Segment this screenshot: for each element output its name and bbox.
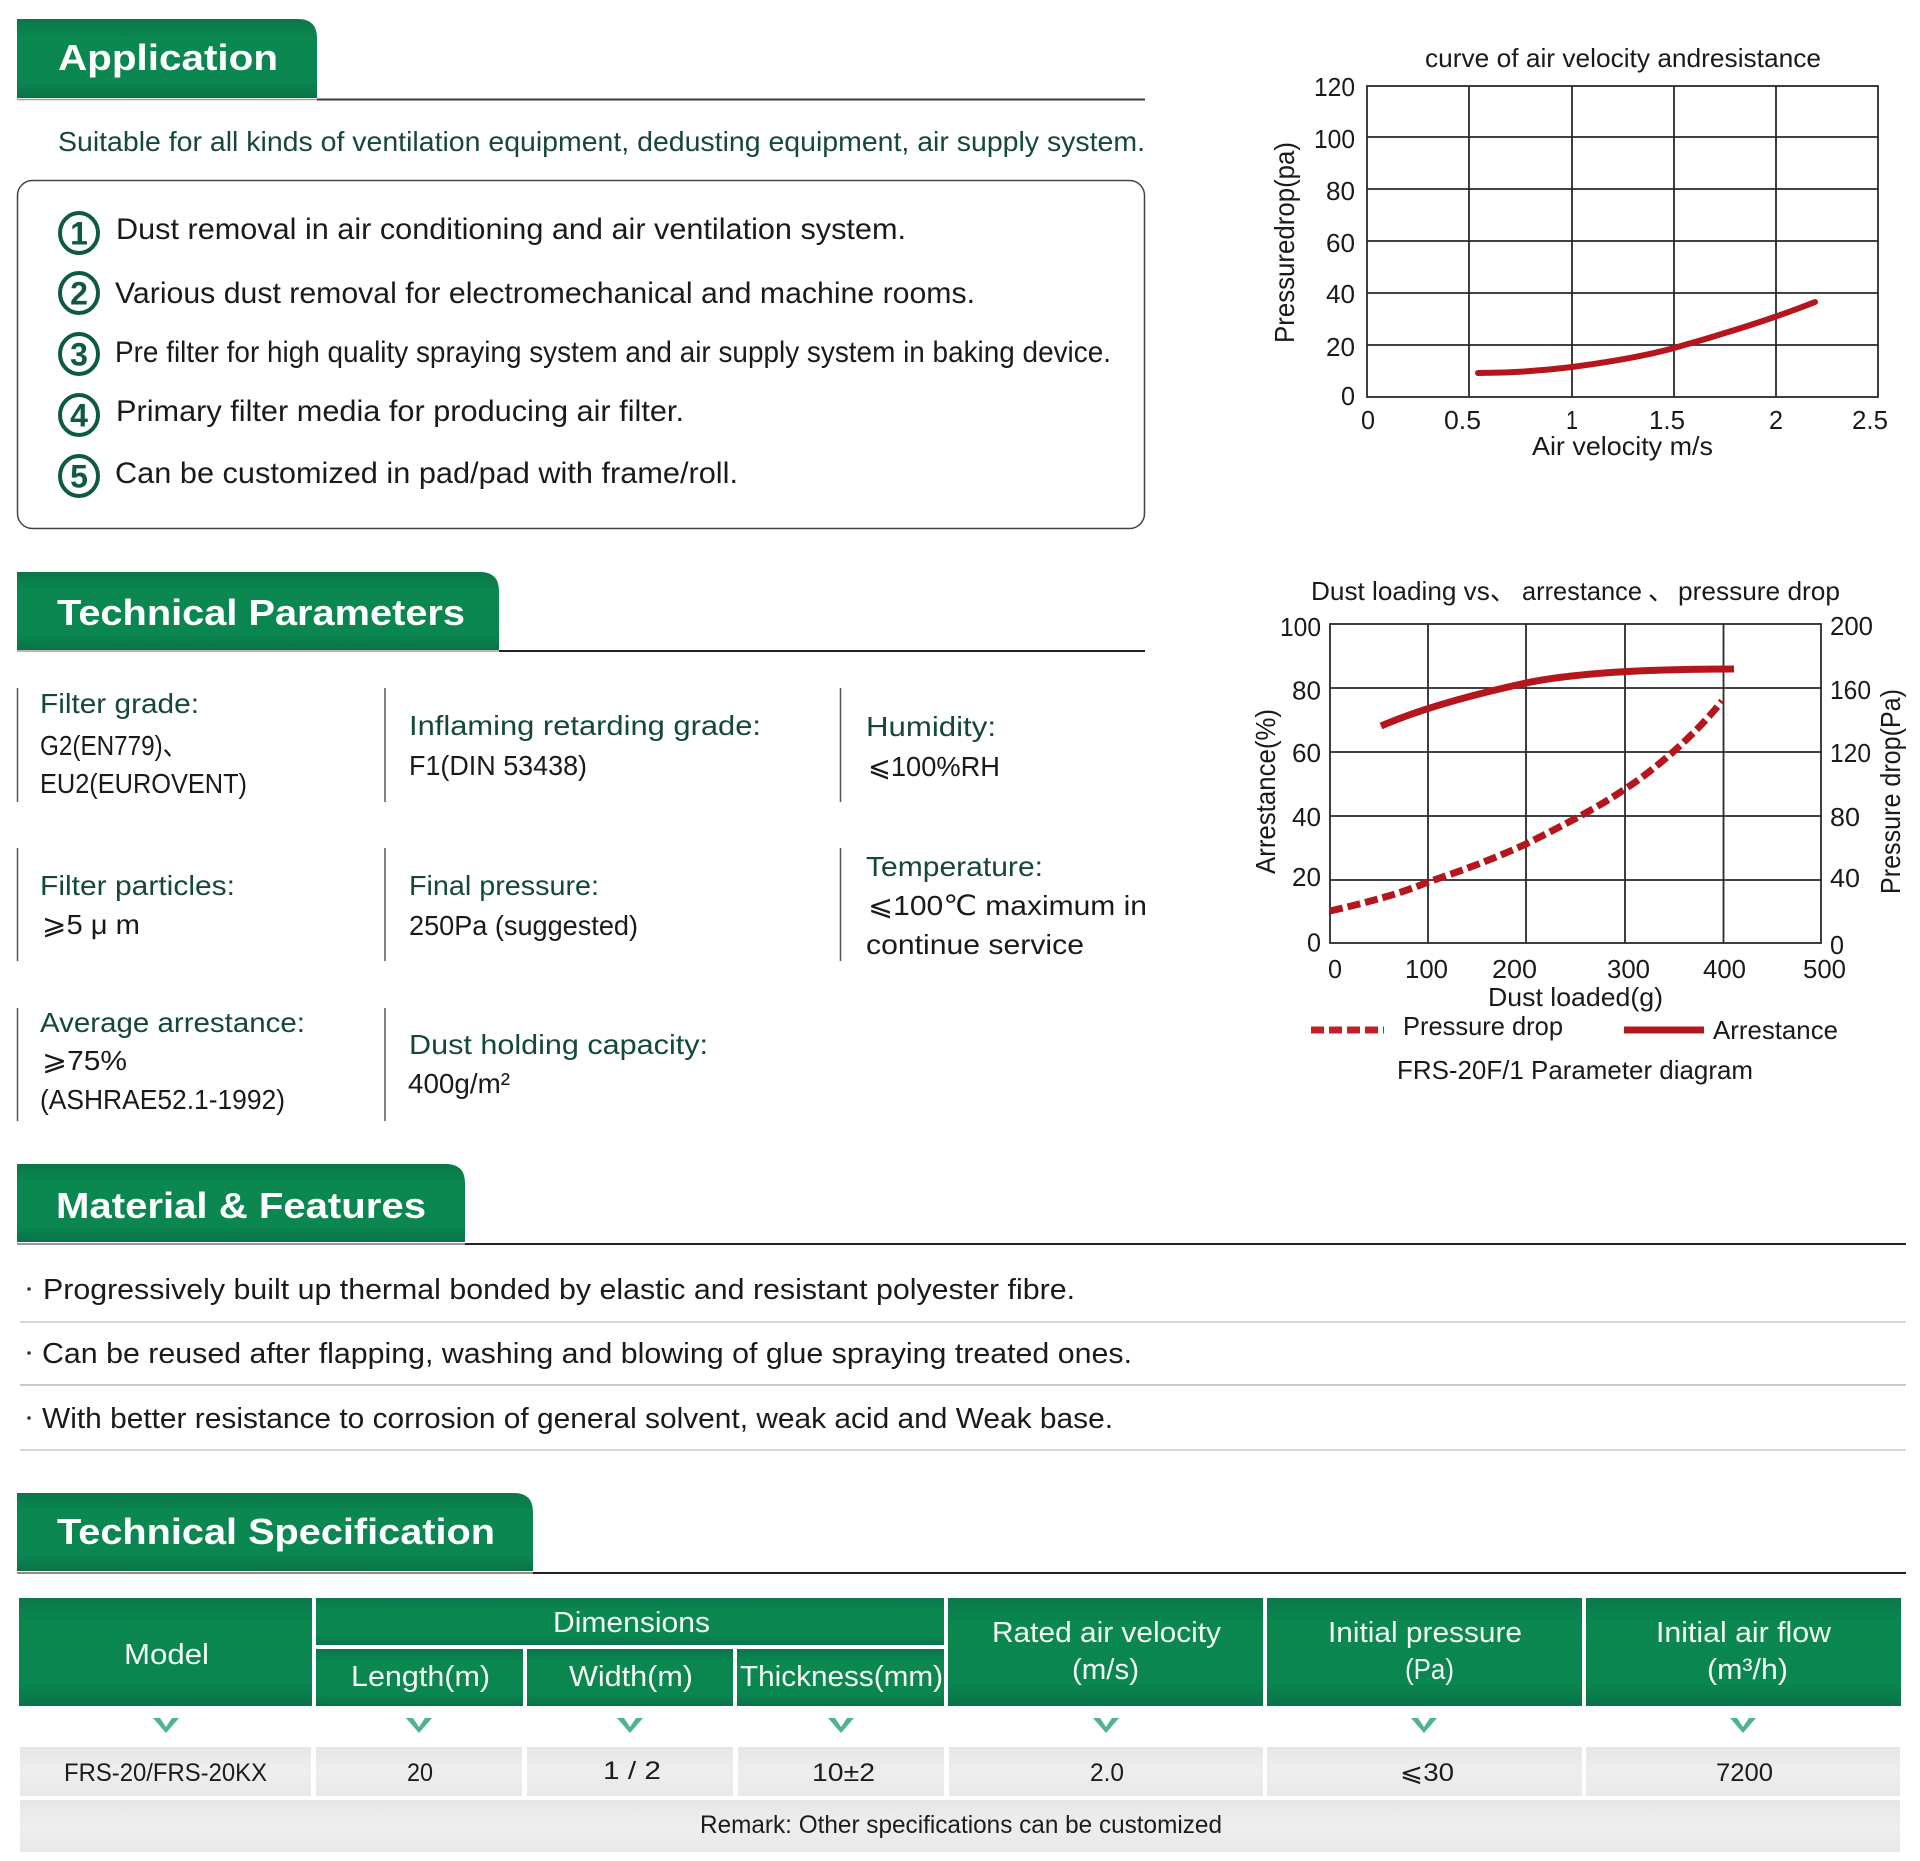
curve: arrestance [1381, 669, 1734, 726]
right axis ticks [1830, 611, 1873, 960]
x axis label: Air velocity m/s [1532, 431, 1713, 461]
parameter: average arrestance [40, 1007, 305, 1115]
chart: air velocity and resistance [1269, 43, 1888, 461]
legend: Pressure drop [1403, 1011, 1563, 1041]
table header: Length(m) [351, 1661, 490, 1693]
heading tab: Material & Features [17, 1164, 465, 1242]
x axis ticks: 0.5 [1444, 405, 1481, 435]
table data row: 7200 [1716, 1759, 1773, 1787]
y axis ticks: 0 [1341, 381, 1355, 411]
table remark row: Remark: Other specifications can be customized [700, 1811, 1222, 1839]
right axis ticks: 0 [1830, 930, 1844, 960]
chart title: 、 [1648, 576, 1674, 606]
chart title: curve of air velocity andresistance [1425, 43, 1821, 73]
parameter: humidity [866, 711, 1000, 782]
x axis ticks: 0 [1361, 405, 1375, 435]
parameter: dust holding capacity [408, 1029, 708, 1099]
list item 1: Dust removal in air conditioning and air ventilation system. [116, 213, 906, 246]
chart title: Dust loading vs、 [1311, 576, 1516, 606]
x axis ticks: 1 [1566, 405, 1578, 435]
parameter: temperature: ⩽100℃ maximum in [868, 890, 1147, 921]
list item 4: 4 [70, 398, 88, 434]
parameter: temperature [866, 851, 1147, 960]
diagram caption: FRS-20F/1 Parameter diagram [1397, 1055, 1753, 1085]
chart title [1311, 576, 1840, 606]
table data row [20, 1747, 1900, 1796]
x axis ticks: 2 [1769, 405, 1783, 435]
chart title: arrestance [1522, 576, 1642, 606]
parameter: filter particles: ⩾5 μ m [42, 909, 140, 940]
x axis ticks: 1.5 [1649, 405, 1685, 435]
panel: technical parameters [17, 572, 1147, 1121]
table header: (m/s) [1072, 1654, 1139, 1686]
table header: (m³/h) [1707, 1654, 1788, 1686]
x axis label: Dust loaded(g) [1488, 982, 1663, 1012]
left axis ticks: 20 [1292, 862, 1321, 892]
right axis ticks: 80 [1830, 802, 1860, 832]
x axis ticks: 0 [1328, 954, 1342, 984]
table header: Initial air flow [1656, 1617, 1832, 1649]
table header: Width(m) [569, 1661, 693, 1693]
parameter: final pressure [409, 870, 638, 941]
parameter: filter particles: Filter particles: [40, 870, 235, 901]
list item 1: 1 [70, 216, 88, 252]
y axis ticks: 20 [1326, 332, 1355, 362]
table header: Thickness(mm) [740, 1661, 943, 1693]
table data row: FRS-20/FRS-20KX [64, 1759, 267, 1787]
left axis ticks: 100 [1280, 612, 1321, 642]
icon: chevrons [153, 1718, 1756, 1733]
parameter: final pressure: Final pressure: [409, 870, 599, 901]
parameter: humidity: ⩽100%RH [868, 751, 1000, 782]
chart: dust loading vs arrestance and pressure drop [1250, 576, 1906, 1085]
box: application list [18, 180, 1144, 528]
chart title: pressure drop [1678, 576, 1840, 606]
parameter: average arrestance: Average arrestance: [40, 1007, 305, 1038]
parameter: filter particles [40, 870, 235, 940]
parameter: temperature: continue service [866, 929, 1084, 960]
legend: Arrestance [1713, 1015, 1838, 1045]
parameter: inflaming retarding grade [409, 710, 761, 781]
table data row: 1 / 2 [603, 1757, 661, 1785]
x axis ticks [1361, 405, 1888, 435]
y axis ticks: 40 [1326, 279, 1355, 309]
list item 2: 2 [70, 276, 88, 312]
heading tab: Technical Specification: Technical Specification [57, 1511, 495, 1552]
left axis ticks: 0 [1307, 928, 1321, 958]
left axis ticks: 60 [1292, 738, 1321, 768]
legend [1311, 1011, 1838, 1045]
x axis ticks: 200 [1492, 954, 1537, 984]
table header: Model [124, 1639, 209, 1671]
parameter: temperature: Temperature: [866, 851, 1043, 882]
x axis ticks: 2.5 [1852, 405, 1888, 435]
left axis ticks: 80 [1292, 676, 1321, 706]
table data row: ⩽30 [1400, 1759, 1454, 1787]
feature 3: With better resistance to corrosion of general solvent, weak acid and Weak base. [42, 1403, 1113, 1435]
table remark row [20, 1800, 1900, 1852]
heading tab: Application [17, 19, 317, 98]
parameter: inflaming retarding grade: Inflaming retarding grade: [409, 710, 761, 741]
left axis label: Arrestance(%) [1250, 709, 1281, 874]
y axis ticks: 80 [1326, 176, 1355, 206]
table header: Initial pressure [1328, 1617, 1522, 1649]
feature 2: Can be reused after flapping, washing and blowing of glue spraying treated ones. [42, 1338, 1132, 1370]
heading tab: Technical Parameters: Technical Parameters [57, 592, 465, 633]
y axis ticks: 100 [1314, 124, 1355, 154]
parameter: dust holding capacity: 400g/m² [408, 1068, 510, 1099]
parameter: filter grade [40, 688, 247, 799]
parameter: filter grade: G2(EN779)、 [40, 730, 187, 761]
text: application summary: Suitable for all kinds of ventilation equipment, dedusting equipment, air supply system. [58, 126, 1145, 157]
heading tab: Technical Parameters [17, 572, 499, 650]
parameter: filter grade: EU2(EUROVENT) [40, 768, 247, 799]
y axis ticks: 120 [1314, 72, 1355, 102]
list item 2: Various dust removal for electromechanical and machine rooms. [115, 277, 975, 310]
x axis ticks: 500 [1803, 954, 1846, 984]
list item 5: 5 [70, 458, 88, 494]
x axis ticks: 100 [1405, 954, 1448, 984]
y axis ticks [1314, 72, 1355, 411]
x axis ticks: 400 [1703, 954, 1746, 984]
parameter: filter grade: Filter grade: [40, 688, 199, 719]
curve [1478, 302, 1815, 373]
table data row: 2.0 [1090, 1759, 1124, 1787]
parameter: final pressure: 250Pa (suggested) [409, 910, 638, 941]
heading tab: Material & Features: Material & Features [56, 1185, 426, 1226]
parameter: average arrestance: ⩾75% [42, 1045, 127, 1076]
parameter: dust holding capacity: Dust holding capacity: [409, 1029, 708, 1060]
list item 5: Can be customized in pad/pad with frame/roll. [115, 457, 738, 490]
right axis ticks: 120 [1830, 738, 1871, 768]
panel: application [17, 19, 1145, 528]
panel: material and features [17, 1164, 1906, 1450]
table header [19, 1598, 1901, 1706]
list item 3: 3 [70, 336, 88, 372]
y axis ticks: 60 [1326, 228, 1355, 258]
right axis ticks: 160 [1830, 675, 1871, 705]
heading tab: Application: Application [58, 37, 278, 78]
table header: Rated air velocity [992, 1617, 1222, 1649]
left axis ticks: 40 [1292, 802, 1321, 832]
heading tab: Technical Specification [17, 1493, 533, 1571]
table data row: 20 [407, 1759, 433, 1787]
table header: (Pa) [1405, 1654, 1454, 1686]
parameter: humidity: Humidity: [866, 711, 996, 742]
curve: pressure drop [1330, 701, 1722, 911]
panel: technical specification [17, 1493, 1906, 1852]
left axis ticks [1280, 612, 1321, 958]
parameter: inflaming retarding grade: F1(DIN 53438) [409, 750, 587, 781]
right axis label: Pressure drop(Pa) [1875, 689, 1906, 894]
x axis ticks [1328, 954, 1846, 984]
table data row: 10±2 [812, 1759, 875, 1787]
feature 1: Progressively built up thermal bonded by elastic and resistant polyester fibre. [43, 1274, 1075, 1306]
right axis ticks: 40 [1830, 863, 1860, 893]
parameter: average arrestance: (ASHRAE52.1-1992) [40, 1084, 285, 1115]
list item 3: Pre filter for high quality spraying system and air supply system in baking device. [115, 336, 1111, 369]
table header: Dimensions [553, 1607, 710, 1639]
list item 4: Primary filter media for producing air filter. [116, 395, 684, 428]
right axis ticks: 200 [1830, 611, 1873, 641]
y axis label: Pressuredrop(pa) [1269, 142, 1300, 343]
x axis ticks: 300 [1607, 954, 1650, 984]
